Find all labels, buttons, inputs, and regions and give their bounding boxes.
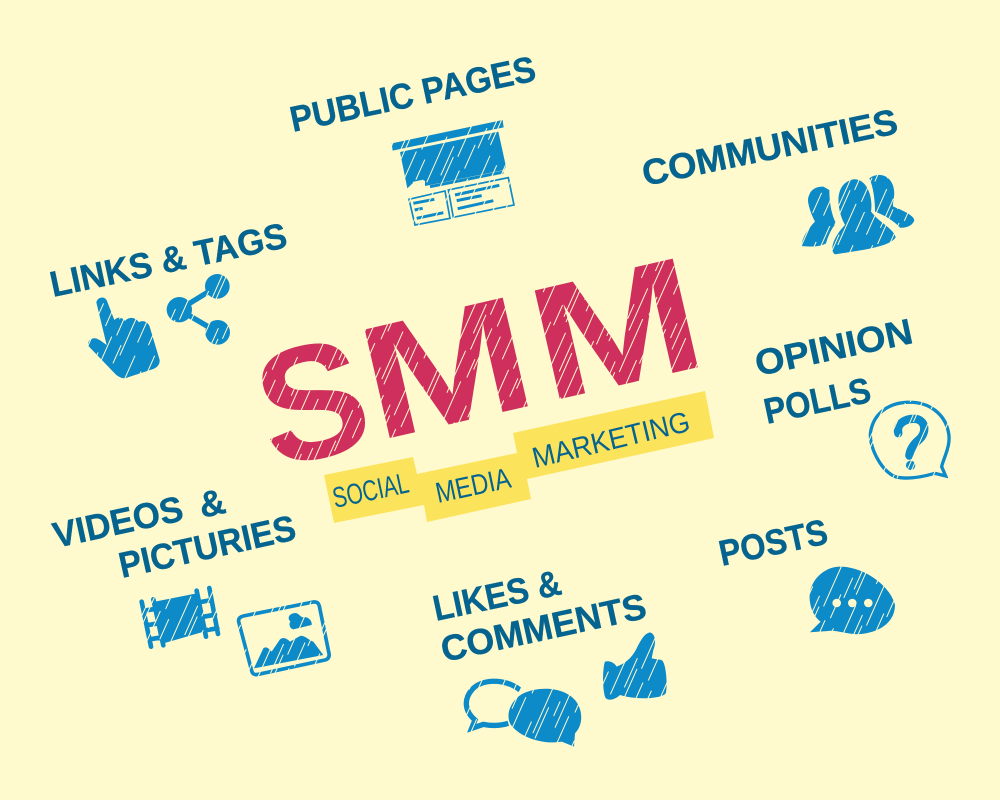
icon: picture [239, 602, 329, 675]
label: public pages: PUBLIC PAGES [286, 48, 539, 140]
title: SMM: M [514, 221, 719, 436]
title: SMM: S [239, 302, 385, 503]
icon: speech bubble with dots [810, 567, 895, 634]
icon: thumbs up [603, 632, 667, 700]
icon: comment bubbles [466, 681, 581, 747]
icon: share [167, 274, 230, 345]
label: posts: POSTS [715, 511, 831, 574]
label: ampersand: & [195, 480, 229, 526]
tagline: marketing: MARKETING [529, 406, 693, 475]
icon: question bubble [870, 402, 949, 478]
icon: public pages [392, 120, 514, 225]
tagline: media: MEDIA [433, 463, 514, 510]
icon: communities [802, 175, 914, 254]
label: polls: POLLS [760, 369, 874, 432]
label: likes and: LIKES & [429, 562, 565, 629]
label: comments: COMMENTS [437, 585, 650, 670]
icon: pointing hand [88, 297, 160, 378]
title: SMM: M [344, 260, 549, 475]
icon: film strip [142, 588, 218, 647]
tagline banner [324, 391, 714, 523]
label: opinion: OPINION [751, 310, 916, 384]
label: videos: VIDEOS [49, 488, 187, 556]
label: communities: COMMUNITIES [638, 101, 901, 194]
tagline: social: SOCIAL [330, 468, 412, 515]
label: links and tags: LINKS & TAGS [46, 215, 290, 305]
title: SMM [239, 221, 719, 503]
label: pictures: PICTURIES [115, 507, 299, 586]
